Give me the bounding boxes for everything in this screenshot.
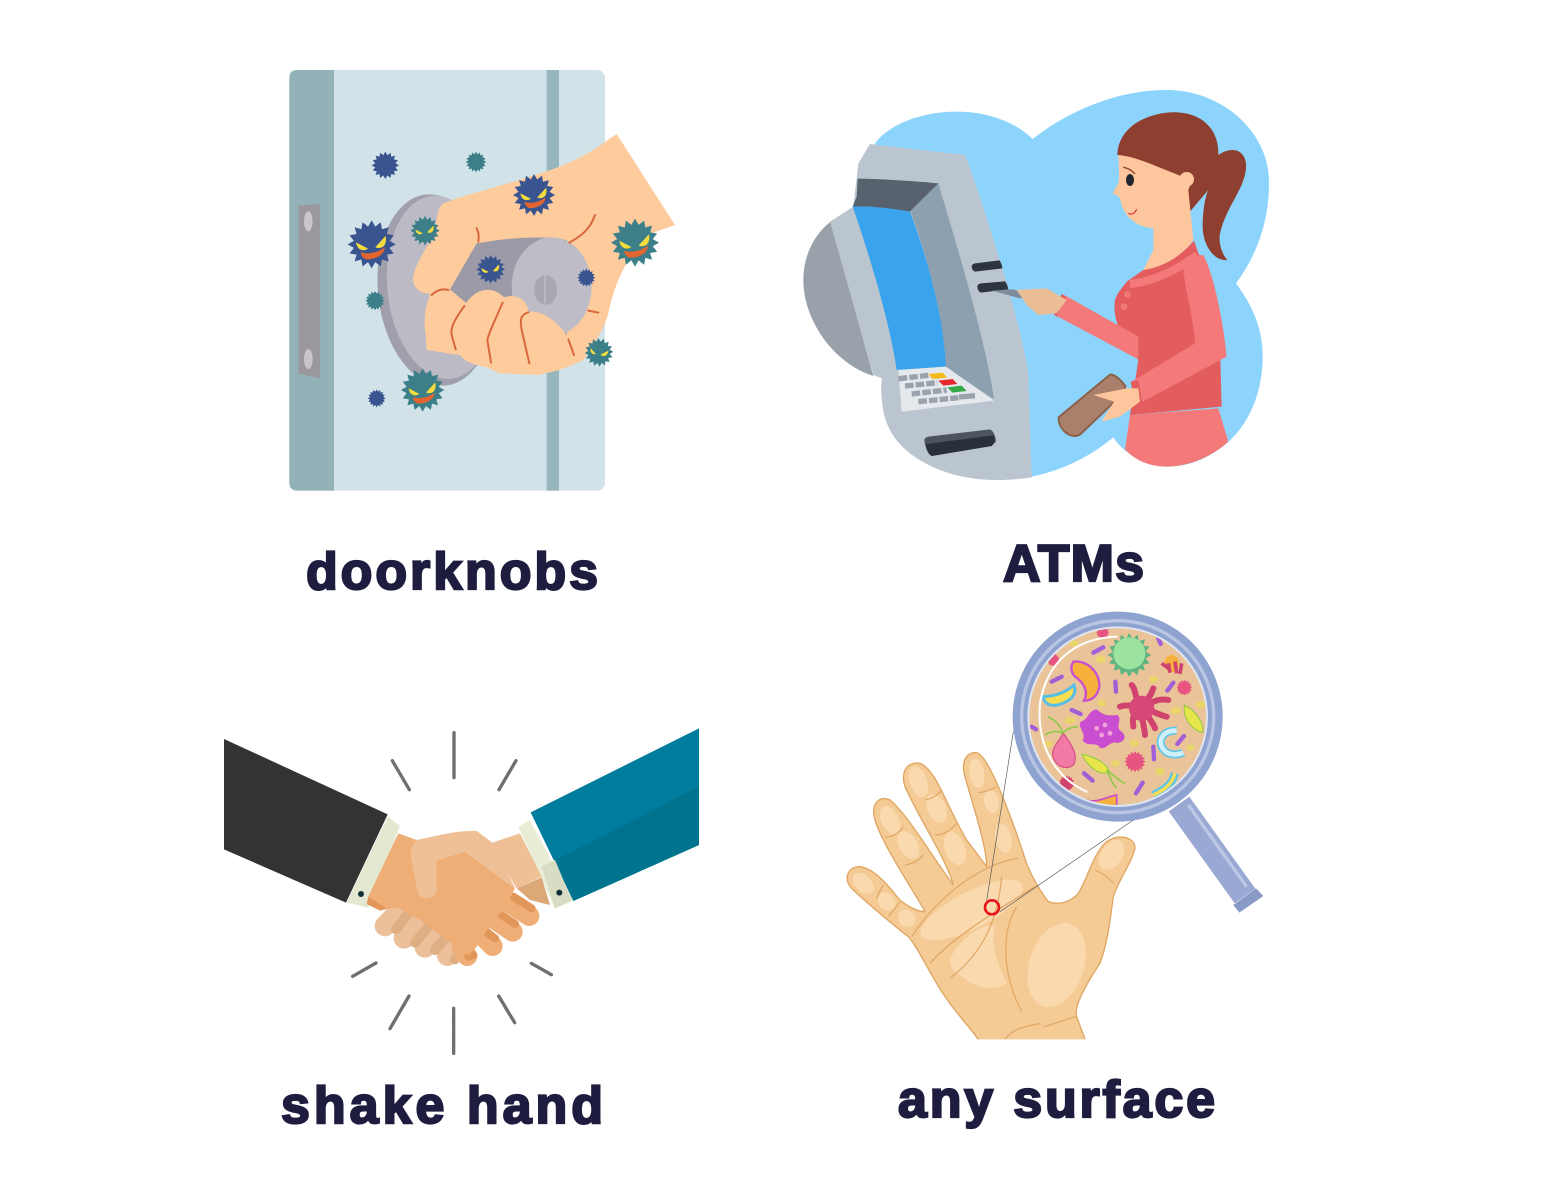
heading: ATMs: ATMs	[1003, 535, 1144, 593]
dark suit sleeve	[224, 739, 388, 903]
red target circle	[985, 900, 999, 914]
door	[289, 70, 605, 491]
panel: doorknobs illustration	[289, 70, 675, 491]
panel: handshake illustration	[224, 728, 699, 1053]
heading: shake hand: shake hand	[281, 1077, 603, 1135]
ATM machine	[803, 144, 1032, 480]
teal suit sleeve	[531, 728, 699, 901]
hand gripping knob	[413, 134, 675, 375]
palm of hand	[847, 753, 1135, 1039]
panel: ATM illustration	[803, 90, 1269, 480]
knob base	[368, 188, 505, 392]
radiating lines	[353, 733, 551, 1053]
zoom pointer lines	[987, 732, 1133, 912]
blue blob background	[857, 90, 1269, 477]
door latch plate	[298, 204, 320, 378]
microbes under lens	[1032, 626, 1206, 807]
germs on door and hand	[348, 152, 659, 412]
shirt cuffs	[347, 817, 573, 908]
magnifying glass	[1013, 612, 1263, 913]
panel: hand and magnifier illustration	[847, 612, 1263, 1039]
woman at ATM	[1017, 112, 1246, 467]
heading: any surface: any surface	[898, 1071, 1215, 1129]
clasped hands	[367, 831, 550, 959]
heading: doorknobs: doorknobs	[306, 543, 598, 601]
